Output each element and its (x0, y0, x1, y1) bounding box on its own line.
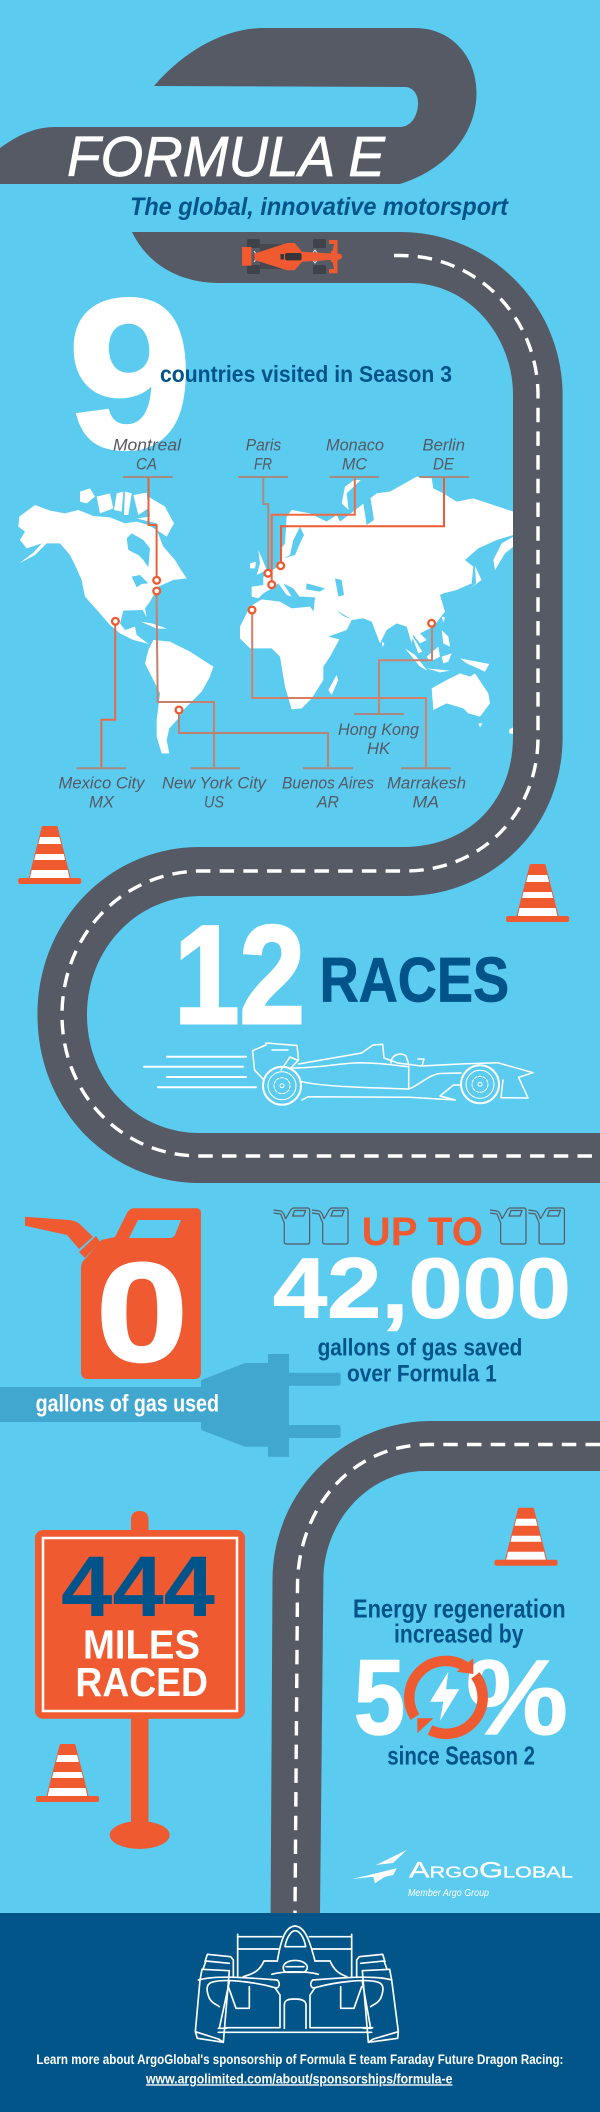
races heading: RACES (320, 946, 509, 1016)
map city labels: Buenos Aires (282, 773, 374, 792)
map city labels: HK (367, 739, 391, 758)
road: top header track (0, 28, 476, 184)
ArgoGlobal logo (352, 1850, 573, 1899)
map city labels: DE (433, 454, 455, 473)
map city labels (58, 436, 466, 811)
map city labels: CA (136, 454, 157, 473)
icon: small cans right (490, 1208, 564, 1244)
cone: left upper (18, 826, 81, 884)
sign pole and foot (131, 1511, 148, 1825)
icon: fuel can (25, 1208, 201, 1379)
gallons saved caption (318, 1335, 522, 1387)
sign board (35, 1530, 245, 1719)
fifty percent figure (354, 1637, 568, 1757)
gallons saved caption: gallons of gas saved (318, 1335, 522, 1362)
energy regeneration caption: Energy regeneration (353, 1593, 566, 1623)
map city labels: Marrakesh (387, 773, 466, 792)
map city labels: Paris (246, 436, 282, 455)
road: main winding track (38, 232, 600, 1183)
icon: front-view race car (195, 1926, 398, 2042)
logo mark (352, 1850, 407, 1883)
icon: electric plug (0, 1354, 341, 1457)
fifty percent figure: 5 (354, 1637, 405, 1757)
map city labels: FR (254, 454, 272, 473)
subtitle: The global, innovative motorsport (130, 193, 510, 221)
icon: small cans left (274, 1208, 348, 1244)
fifty percent figure: % (466, 1637, 568, 1757)
miles raced text: MILES (83, 1621, 200, 1667)
panel: footer (0, 1913, 600, 2112)
map city labels: Hong Kong (338, 720, 420, 739)
map city labels: Mexico City (58, 773, 146, 792)
map city labels: Montreal (113, 436, 182, 455)
icon: energy regeneration ring (409, 1658, 483, 1734)
map connector lines (101, 477, 444, 768)
big number twelve: 12 (174, 896, 305, 1053)
gallons saved caption: over Formula 1 (347, 1360, 497, 1387)
road centre dashes: main track (62, 256, 600, 1156)
map city labels: Monaco (326, 436, 384, 455)
energy regeneration caption: increased by (394, 1618, 524, 1648)
map: Americas (18, 488, 213, 753)
cone: right upper (506, 864, 569, 922)
icon: top-view race car (242, 239, 342, 274)
road sign with miles raced (35, 1511, 245, 1849)
map city labels: AR (316, 792, 339, 811)
since season caption: since Season 2 (387, 1740, 535, 1770)
miles raced text (75, 1621, 208, 1705)
world map (18, 477, 513, 753)
map city labels: MX (89, 792, 115, 811)
cone: left lower (36, 1744, 99, 1802)
42,000 number: 42,000 (273, 1242, 571, 1337)
cone: right lower (494, 1508, 558, 1566)
map: Europe, Asia, Africa, Australia (240, 477, 513, 734)
miles raced text: RACED (75, 1659, 208, 1705)
miles number: 444 (61, 1539, 215, 1635)
map city labels: US (204, 792, 225, 811)
logo tagline: Member Argo Group (408, 1887, 489, 1899)
map city labels: MA (412, 792, 439, 811)
logo wordmark: ARGOGLOBAL (409, 1858, 573, 1882)
up to heading: UP TO (362, 1210, 483, 1254)
map city labels: New York City (162, 773, 267, 792)
map location markers (112, 562, 435, 713)
map label rules (76, 477, 469, 768)
road: lower track (271, 1421, 600, 1913)
icon: side-view race car with speed lines (144, 1043, 533, 1105)
zero gallons number: 0 (96, 1233, 188, 1391)
gallons used caption: gallons of gas used (36, 1391, 219, 1418)
countries caption: countries visited in Season 3 (160, 361, 452, 387)
energy regeneration caption (353, 1593, 566, 1648)
title: FORMULA E (67, 125, 386, 189)
big number nine: 9 (68, 255, 192, 492)
map city labels: Berlin (422, 436, 465, 455)
map city labels: MC (342, 454, 368, 473)
road centre dashes: lower track (295, 1444, 600, 1913)
footer link: www.argolimited.com/about/sponsorships/formula-e (145, 2071, 453, 2086)
